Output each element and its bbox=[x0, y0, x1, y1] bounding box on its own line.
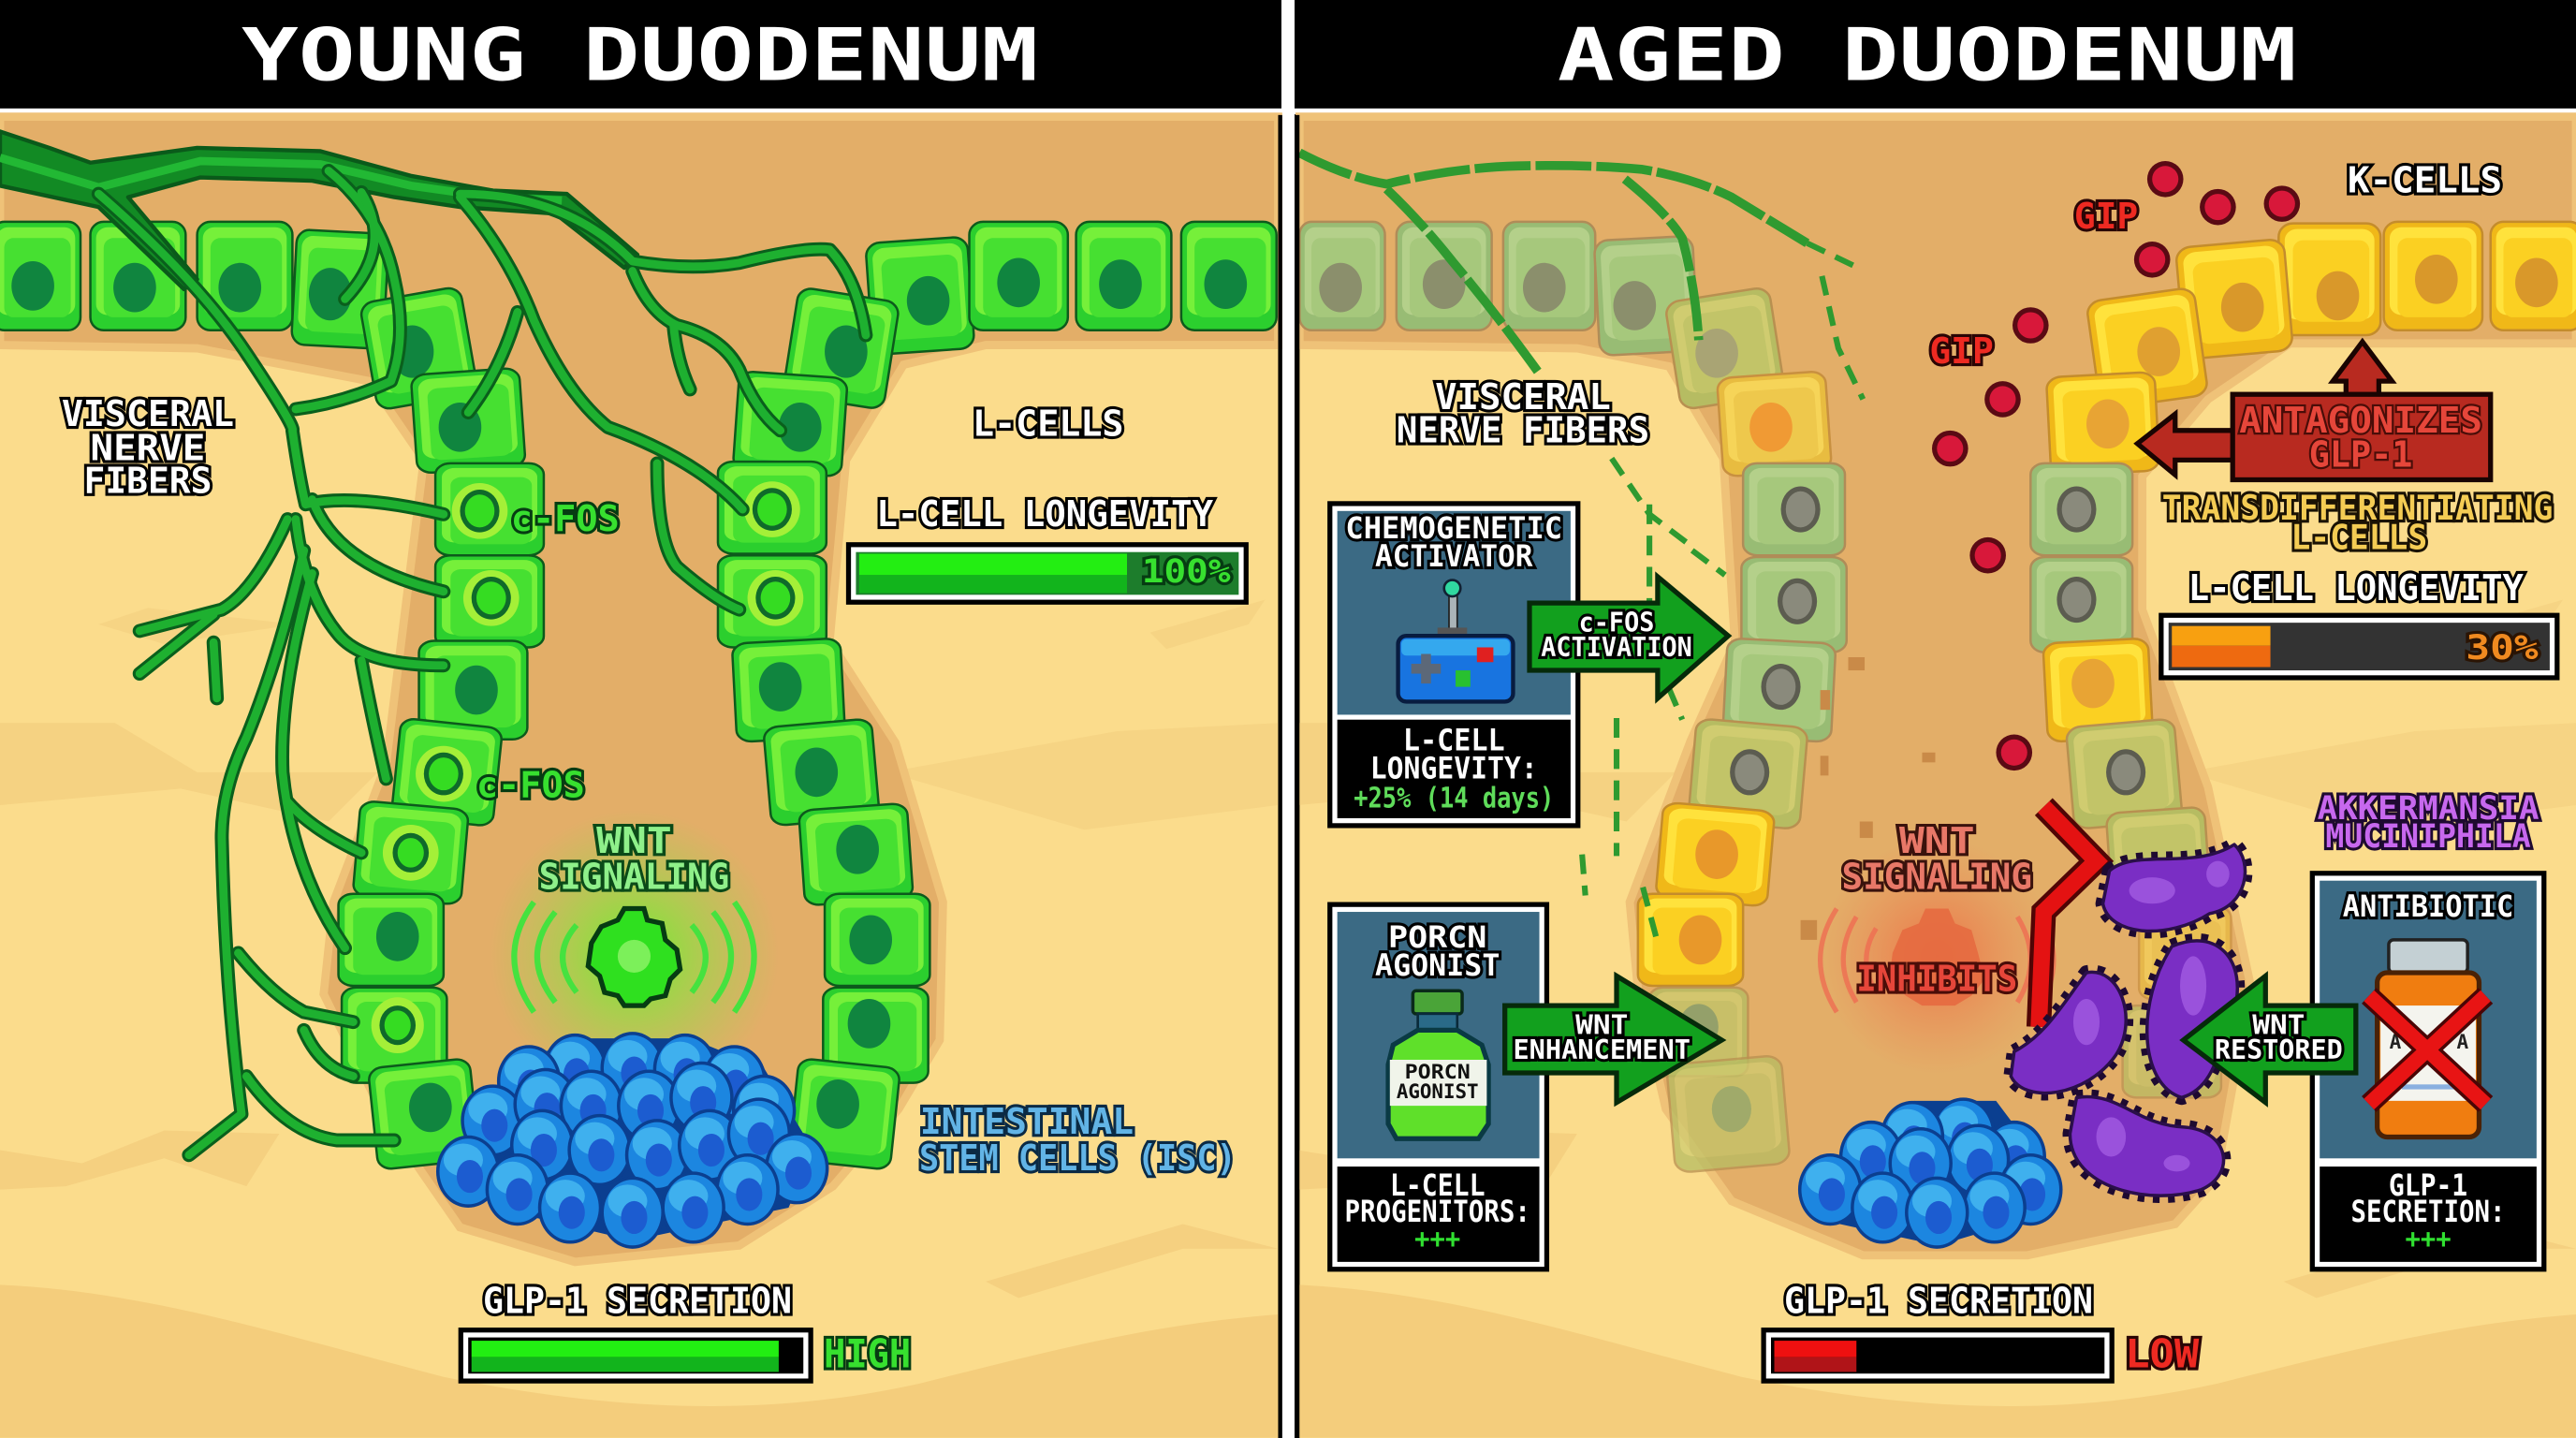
label: WNT signaling bbox=[539, 820, 729, 899]
label: WNT signaling: WNT bbox=[596, 820, 672, 862]
label: WNT signaling inhibited: WNT bbox=[1899, 820, 1975, 862]
gauge: L-cell longevity 100%: 100% bbox=[1142, 552, 1231, 591]
panel: antibiotic: SECRETION: bbox=[2351, 1196, 2506, 1229]
arrow: WNT enhancement: WNT bbox=[1575, 1010, 1628, 1041]
gauge: GLP-1 secretion low: GLP-1 SECRETION bbox=[1784, 1280, 2093, 1322]
panel: PORCN agonist: L-CELL bbox=[1390, 1169, 1486, 1203]
glow: WNT signaling bbox=[490, 810, 779, 1099]
panel: PORCN agonist: AGONIST bbox=[1375, 949, 1500, 983]
aged left wall cells bbox=[1299, 222, 1847, 1173]
gauge: L-cell longevity 30%: L-CELL LONGEVITY bbox=[2188, 567, 2525, 609]
panel: PORCN agonist: PORCN bbox=[1388, 921, 1486, 955]
akkermansia bacteria bbox=[2011, 844, 2246, 1196]
gauge: GLP-1 secretion high: HIGH bbox=[824, 1331, 911, 1377]
label: intestinal stem cells bbox=[919, 1101, 1237, 1180]
icon: PORCN bottle: AGONIST bbox=[1397, 1079, 1479, 1103]
label: WNT signaling inhibited bbox=[1841, 820, 2032, 1000]
panel edges bbox=[1278, 115, 1282, 1438]
label: WNT signaling: SIGNALING bbox=[539, 857, 729, 899]
L-cells right wall and top row bbox=[718, 222, 1277, 1170]
panel: PORCN agonist: +++ bbox=[1414, 1224, 1460, 1255]
label: transdifferentiating L-cells bbox=[2162, 488, 2553, 557]
panel: antibiotic: +++ bbox=[2405, 1224, 2452, 1255]
panel: chemogenetic activator bbox=[1327, 501, 1580, 829]
lumen and crypt tissue bbox=[1299, 117, 2576, 1255]
label: transdifferentiating L-cells: TRANSDIFFERENTIATING bbox=[2162, 488, 2553, 528]
label: visceral nerve fibers: VISCERAL bbox=[1435, 376, 1611, 418]
icon: PORCN bottle bbox=[1388, 990, 1488, 1138]
label: visceral nerve fibers: VISCERAL bbox=[62, 393, 234, 435]
panel: chemogenetic activator: +25% (14 days) bbox=[1354, 782, 1554, 814]
label: akkermansia muciniphila bbox=[2318, 789, 2539, 856]
panel: chemogenetic activator: ACTIVATOR bbox=[1375, 540, 1533, 574]
label: akkermansia muciniphila: AKKERMANSIA bbox=[2318, 789, 2539, 828]
gauge: L-cell longevity 100% bbox=[846, 493, 1249, 605]
label: L-cells: L-CELLS bbox=[973, 403, 1123, 445]
icon: faded WNT blob bbox=[1889, 909, 1984, 1005]
glow: faded WNT signaling bbox=[1819, 838, 2056, 1075]
label: GIP upper: GIP bbox=[2074, 196, 2138, 238]
label: c-FOS upper: c-FOS bbox=[511, 498, 620, 540]
panel: PORCN agonist: PROGENITORS: bbox=[1345, 1196, 1530, 1229]
panel: chemogenetic activator: LONGEVITY: bbox=[1370, 752, 1538, 785]
arrow: WNT restored bbox=[2184, 976, 2356, 1103]
label: K-cells: K-CELLS bbox=[2348, 160, 2502, 202]
panel: young duodenum bbox=[0, 117, 1278, 1438]
label: WNT signaling inhibited: INHIBITS bbox=[1856, 958, 2017, 1000]
L-cells left wall and top row bbox=[0, 222, 544, 1170]
icon: red cross bbox=[2369, 996, 2485, 1104]
label: visceral nerve fibers: NERVE bbox=[91, 428, 205, 470]
arrow: c-FOS activation: ACTIVATION bbox=[1541, 632, 1692, 663]
gauge: GLP-1 secretion low bbox=[1761, 1280, 2200, 1384]
signal arcs bbox=[514, 902, 754, 1012]
panel: aged duodenum bbox=[1298, 117, 2576, 1438]
visceral nerve fibers bbox=[0, 131, 866, 1155]
icon: PORCN bottle: PORCN bbox=[1405, 1060, 1471, 1083]
icon: antibiotic bottle bbox=[2369, 940, 2485, 1137]
gauge: L-cell longevity 30%: 30% bbox=[2466, 627, 2539, 668]
arrow: c-FOS activation: c-FOS bbox=[1579, 608, 1654, 638]
callout: antagonizes GLP-1 with arrows: GLP-1 bbox=[2309, 434, 2412, 477]
arrow: WNT restored: RESTORED bbox=[2215, 1034, 2343, 1065]
gauge: L-cell longevity 100%: L-CELL LONGEVITY bbox=[876, 493, 1214, 536]
arrow: WNT enhancement bbox=[1505, 976, 1721, 1103]
label: intestinal stem cells: STEM CELLS (ISC) bbox=[919, 1137, 1237, 1180]
title: aged duodenum: AGED DUODENUM bbox=[1558, 14, 2297, 98]
callout: antagonizes GLP-1 with arrows: ANTAGONIZES bbox=[2239, 400, 2482, 442]
icon: antibiotic bottle: A bbox=[2390, 1030, 2402, 1053]
gauge: L-cell longevity 30% bbox=[2159, 567, 2559, 681]
label: WNT signaling inhibited: SIGNALING bbox=[1841, 857, 2032, 899]
label: visceral nerve fibers bbox=[62, 393, 234, 503]
arrow: WNT restored: WNT bbox=[2252, 1010, 2305, 1041]
label: visceral nerve fibers: FIBERS bbox=[84, 461, 212, 503]
stem cells depleted cluster bbox=[1798, 1097, 2063, 1249]
panel: PORCN agonist bbox=[1327, 902, 1549, 1271]
gauge: GLP-1 secretion high: GLP-1 SECRETION bbox=[483, 1280, 792, 1322]
title: young duodenum: YOUNG DUODENUM bbox=[242, 14, 1038, 98]
inhibition line bbox=[2039, 807, 2097, 1027]
panel: chemogenetic activator: L-CELL bbox=[1403, 725, 1505, 758]
label: transdifferentiating L-cells: L-CELLS bbox=[2291, 517, 2427, 557]
panel: antibiotic: GLP-1 bbox=[2389, 1169, 2467, 1203]
panel: antibiotic: ANTIBIOTIC bbox=[2343, 890, 2513, 924]
red GIP dots bbox=[1932, 161, 2300, 770]
label: akkermansia muciniphila: MUCINIPHILA bbox=[2325, 817, 2531, 856]
icon: antibiotic bottle: A bbox=[2457, 1030, 2469, 1053]
signal arcs bbox=[1821, 909, 2054, 1012]
label: c-FOS lower: c-FOS bbox=[476, 764, 585, 806]
gauge: GLP-1 secretion high bbox=[459, 1280, 911, 1384]
label: visceral nerve fibers bbox=[1397, 376, 1649, 451]
label: intestinal stem cells: INTESTINAL bbox=[920, 1101, 1134, 1143]
icon: game controller bbox=[1398, 580, 1513, 701]
arrow: c-FOS activation bbox=[1530, 577, 1728, 698]
aged nerve fibers bbox=[1299, 153, 1863, 936]
gauge: GLP-1 secretion low: LOW bbox=[2125, 1331, 2200, 1377]
panel: chemogenetic activator: CHEMOGENETIC bbox=[1345, 512, 1562, 546]
arrow: WNT enhancement: ENHANCEMENT bbox=[1513, 1034, 1690, 1065]
icon: WNT blob bbox=[588, 909, 681, 1005]
intestinal stem cells cluster bbox=[436, 1032, 828, 1249]
debris bbox=[1801, 657, 1936, 940]
label: GIP lower: GIP bbox=[1929, 330, 1994, 373]
callout: antagonizes GLP-1 with arrows bbox=[2137, 342, 2491, 479]
K-cells and transdifferentiating right wall bbox=[2030, 222, 2576, 1097]
label: visceral nerve fibers: NERVE FIBERS bbox=[1397, 409, 1649, 451]
lumen and crypt tissue bbox=[0, 117, 1278, 1262]
panel: antibiotic bbox=[2310, 871, 2546, 1271]
divider bbox=[1281, 0, 1295, 1438]
